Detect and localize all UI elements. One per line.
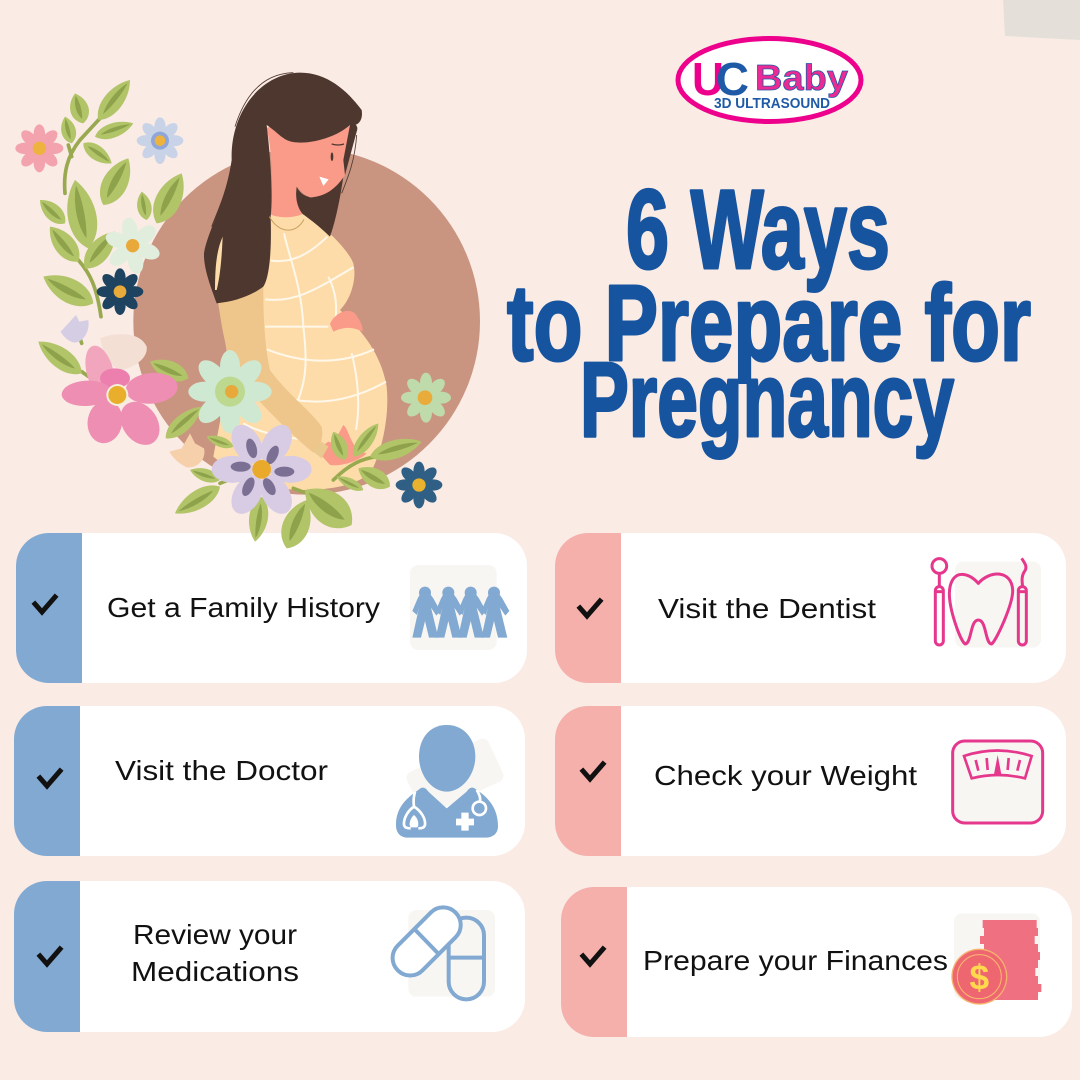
card: Prepare your Finances bbox=[561, 887, 1072, 1037]
icon: tooth and dental tools bbox=[932, 558, 1041, 648]
card: Visit the Doctor bbox=[14, 706, 525, 856]
card: Review your Medications: Medications bbox=[131, 956, 299, 987]
white green flower bbox=[103, 216, 162, 275]
illustration: pregnant woman with flowers bbox=[15, 73, 480, 553]
title: 6 Ways bbox=[626, 167, 890, 292]
card: Visit the Doctor: Visit the Doctor bbox=[115, 755, 328, 786]
logo: UC Baby 3D Ultrasound: Baby bbox=[755, 57, 848, 98]
icon: pills bbox=[385, 900, 495, 999]
logo: UC Baby 3D Ultrasound: U bbox=[692, 53, 724, 105]
card: Review your Medications bbox=[14, 881, 525, 1032]
icon: coin stack bbox=[951, 913, 1041, 1005]
logo: UC Baby 3D Ultrasound bbox=[678, 38, 861, 122]
leaves and stems bbox=[32, 74, 424, 553]
card: Get a Family History: Get a Family History bbox=[107, 592, 380, 623]
peach tulip bbox=[169, 433, 204, 467]
icon: doctor bbox=[396, 725, 506, 838]
icon: weighing scale bbox=[953, 741, 1043, 823]
card: Check your Weight bbox=[555, 706, 1066, 856]
card: Visit the Dentist: Visit the Dentist bbox=[658, 593, 876, 624]
icon: family paper chain bbox=[410, 565, 509, 650]
flowers bbox=[15, 117, 451, 535]
right green flower bbox=[401, 373, 451, 423]
card: Prepare your Finances: Prepare your Finances bbox=[643, 945, 948, 976]
decorative scrap top right bbox=[1003, 0, 1080, 40]
blue flower bbox=[396, 462, 442, 508]
lavender tulip bbox=[61, 315, 89, 343]
icon: coin stack: $ bbox=[970, 958, 990, 997]
card: Visit the Dentist bbox=[555, 533, 1066, 683]
card: Check your Weight: Check your Weight bbox=[654, 760, 917, 791]
navy flower bbox=[97, 268, 143, 315]
pale blue flower bbox=[137, 117, 183, 164]
logo: UC Baby 3D Ultrasound: C bbox=[716, 53, 749, 105]
large pink flower bbox=[61, 342, 179, 452]
cream bud bbox=[100, 334, 147, 370]
card: Review your Medications: Review your bbox=[133, 919, 297, 950]
pink small flower bbox=[15, 124, 63, 172]
title bbox=[507, 167, 1031, 459]
woman figure bbox=[204, 73, 387, 490]
card: Get a Family History bbox=[16, 533, 527, 683]
backdrop circle bbox=[133, 148, 480, 495]
mint flower bbox=[188, 350, 272, 433]
logo: UC Baby 3D Ultrasound: 3D ULTRASOUND bbox=[714, 96, 830, 112]
lavender large flower bbox=[196, 403, 328, 535]
